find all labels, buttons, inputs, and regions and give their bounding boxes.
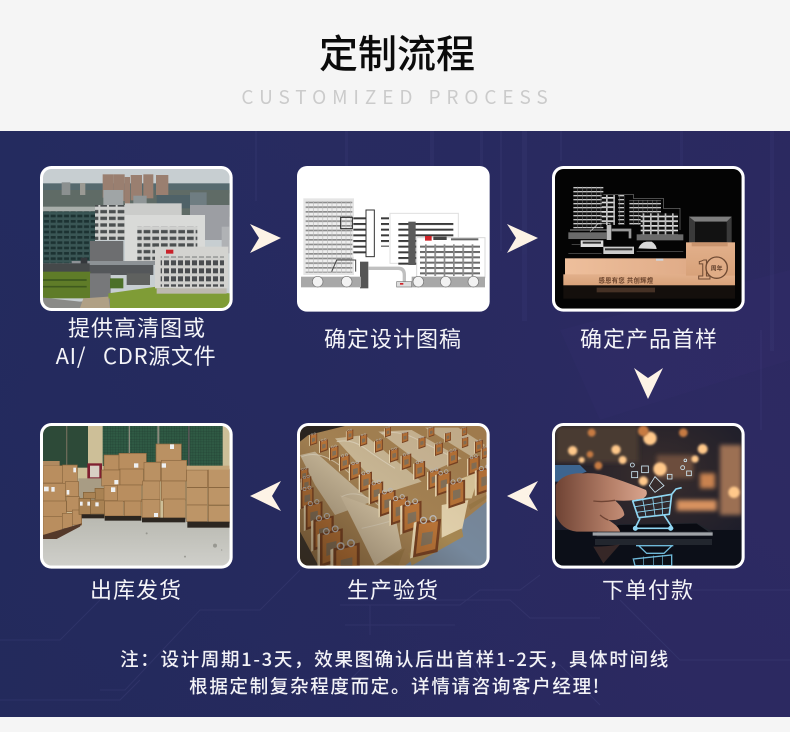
photo: wooden pen-holder sample: 周年 [711, 263, 723, 272]
label: step 1: AI/ CDR源文件 [56, 339, 216, 371]
label: step 4: 下单付款 [602, 573, 694, 605]
label: step 6: 出库发货 [90, 573, 182, 605]
header band [0, 0, 790, 131]
photo: wooden pen-holder sample: 1 [697, 251, 712, 287]
arrow: step 5 to 6 [250, 481, 281, 511]
arrow: step 1 to 2 [250, 224, 281, 253]
label: step 1 [56, 311, 216, 371]
step 2: confirm design drawing [297, 166, 490, 354]
title: 定制流程 [319, 24, 475, 80]
label: step 2: 确定设计图稿 [324, 322, 462, 354]
step 6: warehouse shipment [40, 423, 233, 605]
arrow: step 4 to 5 [507, 481, 538, 511]
step 1: provide images [40, 166, 233, 371]
photo: wooden pen-holder sample [552, 166, 745, 312]
step 5: production inspection [297, 423, 493, 605]
arrow: step 2 to 3 [507, 224, 538, 253]
photo: factory aerial view [40, 166, 233, 311]
note text [120, 646, 670, 699]
note text: 根据定制复杂程度而定。详情请咨询客户经理! [189, 673, 601, 699]
photo: stacked cartons in warehouse [40, 423, 233, 569]
step 3: confirm first sample [552, 166, 745, 354]
drawing: line-art building [297, 166, 490, 312]
photo: wooden pen-holder sample: 感恩有您 共创辉煌 [598, 275, 654, 284]
photo: hand tapping phone with shopping cart [552, 423, 745, 569]
label: step 1: 提供高清图或 [68, 311, 206, 343]
label: step 3: 确定产品首样 [580, 322, 718, 354]
arrow: step 3 down to 4 [634, 368, 663, 399]
step 4: place order and pay [552, 423, 745, 605]
label: step 5: 生产验货 [347, 573, 439, 605]
footer band [0, 717, 790, 732]
subtitle: CUSTOMIZED PROCESS [241, 83, 554, 110]
note text: 注：设计周期1-3天，效果图确认后出首样1-2天，具体时间线 [120, 646, 670, 672]
photo: rows of acrylic calendars [297, 423, 490, 569]
